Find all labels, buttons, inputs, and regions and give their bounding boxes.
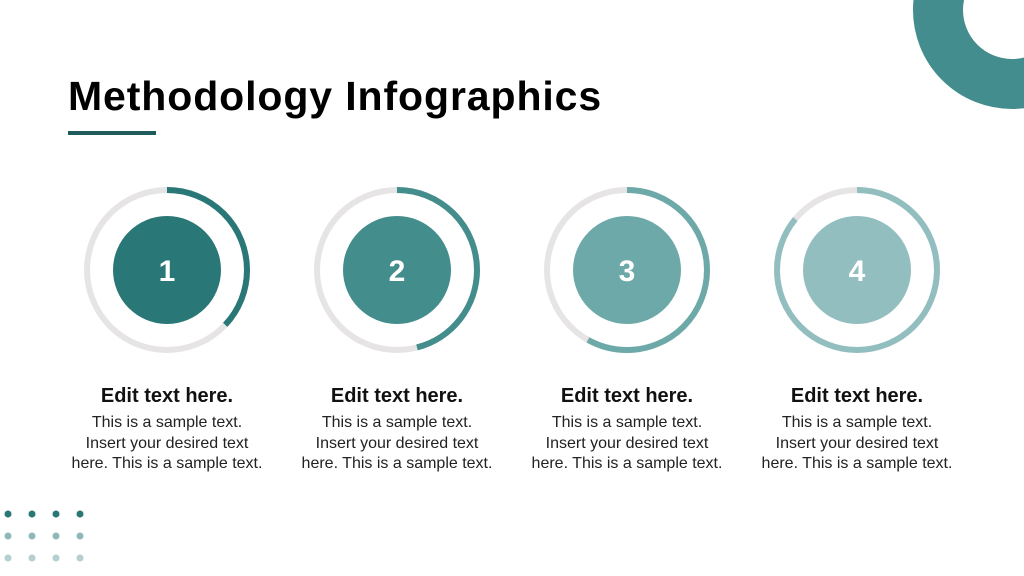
circle 3: 3 [619, 255, 635, 288]
decoration: dot grid [4, 510, 84, 562]
text block 3: This is a sample text. [552, 414, 702, 431]
text block 2: This is a sample text. [322, 414, 472, 431]
title underline [68, 131, 156, 135]
circle 1 [87, 190, 247, 350]
text block 1: Insert your desired text [86, 434, 248, 452]
circle 2 [317, 190, 477, 350]
circle 4: 4 [849, 255, 866, 288]
text block 2: here. This is a sample text. [302, 455, 492, 472]
text block 4: Insert your desired text [776, 434, 938, 452]
circle 2: 2 [389, 255, 405, 288]
text block 4: This is a sample text. [782, 414, 932, 431]
text block 3 [532, 385, 722, 472]
text block 3: here. This is a sample text. [532, 455, 722, 472]
text block 2: Edit text here. [331, 385, 463, 407]
text block 3: Edit text here. [561, 385, 693, 407]
circle 4 [777, 190, 937, 350]
title: Methodology Infographics [68, 73, 602, 119]
text block 1: Edit text here. [101, 385, 233, 407]
text block 2: Insert your desired text [316, 434, 478, 452]
text block 3: Insert your desired text [546, 434, 708, 452]
text block 4 [762, 385, 952, 472]
text block 2 [302, 385, 492, 472]
circle 3 [547, 190, 707, 350]
text block 4: Edit text here. [791, 385, 923, 407]
text block 1: This is a sample text. [92, 414, 242, 431]
circle 1: 1 [159, 255, 175, 288]
text block 1: here. This is a sample text. [72, 455, 262, 472]
text block 4: here. This is a sample text. [762, 455, 952, 472]
text block 1 [72, 385, 262, 472]
